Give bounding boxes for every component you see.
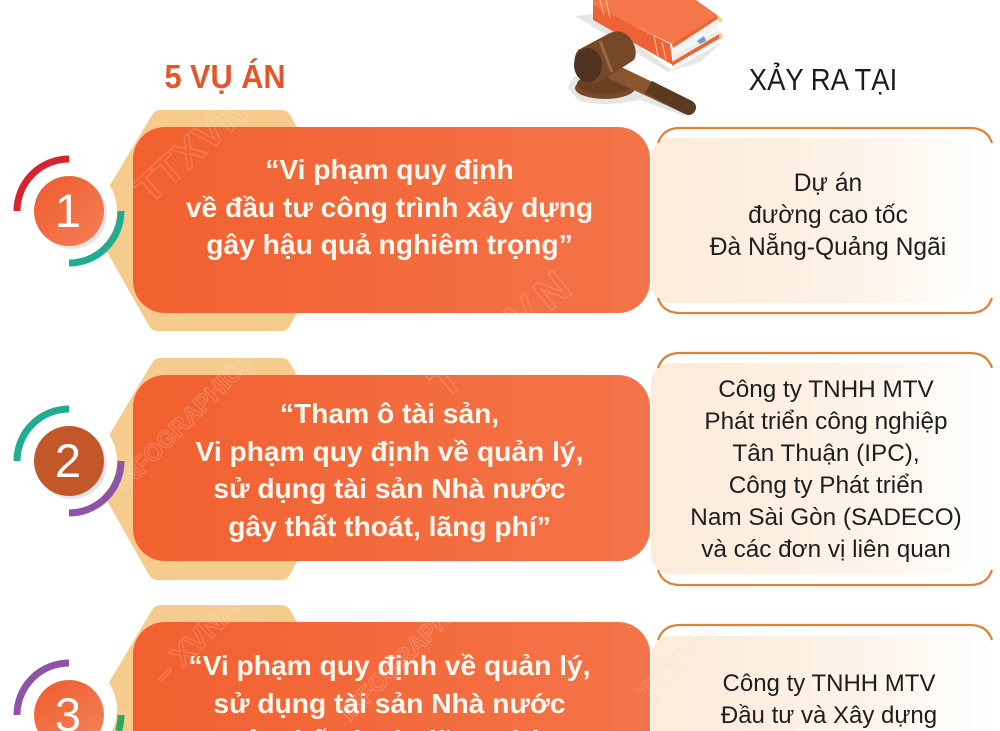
icon: law book and gavel [568, 0, 723, 116]
hexagon backdrop: case 1 [89, 110, 297, 331]
heading: xảy ra tại: XẢY RA TẠI [749, 62, 897, 97]
text: case 2 location: Nam Sài Gòn (SADECO) [690, 504, 962, 531]
text: case 1 location: Dự án [794, 170, 862, 197]
badge: number 3 [17, 662, 121, 731]
number 1: 1 [55, 184, 81, 237]
watermarks: INFOGRAPHICS [110, 347, 259, 496]
text: case 1 title: gây hậu quả nghiêm trọng” [206, 228, 573, 260]
watermarks [110, 88, 724, 726]
watermarks: – XVNA [147, 591, 247, 691]
hexagon backdrop: case 3 [89, 605, 297, 731]
text: case 2 location: và các đơn vị liên quan [701, 536, 951, 563]
badge: number 1 [17, 159, 121, 263]
text: case 2 location: Công ty Phát triển [729, 472, 923, 499]
text: case 1 location [710, 170, 946, 261]
text: case 2 title [196, 397, 583, 542]
text: case 3 location [721, 670, 937, 729]
text: case 3 location: Đầu tư và Xây dựng [721, 702, 937, 729]
text: case 1 location: Đà Nẵng-Quảng Ngãi [710, 234, 946, 261]
text: case 2 location [690, 376, 962, 563]
text: case 1 location: đường cao tốc [748, 202, 908, 229]
watermarks: TTXVN [632, 618, 724, 711]
heading: 5 vụ án: 5 VỤ ÁN [164, 58, 286, 95]
panel: case 2 title background [133, 375, 650, 561]
text: case 2 title: “Tham ô tài sản, [280, 397, 499, 429]
watermarks: INFOGRAPHICS [335, 577, 484, 726]
watermarks: TTXVN [420, 258, 585, 408]
text: case 3 title: sử dụng tài sản Nhà nước [213, 686, 566, 718]
text: case 3 title [188, 649, 590, 731]
text: case 2 location: Phát triển công nghiệp [704, 408, 948, 435]
text: case 2 location: Tân Thuận (IPC), [732, 440, 920, 467]
text: case 1 title: về đầu tư công trình xây dựng [186, 190, 593, 222]
text: case 2 location: Công ty TNHH MTV [718, 376, 934, 403]
text: case 1 title [186, 153, 593, 260]
text: case 2 title: sử dụng tài sản Nhà nước [213, 472, 566, 504]
text: case 2 title: gây thất thoát, lãng phí” [228, 510, 551, 542]
watermarks: TTXVN [127, 88, 257, 212]
panel: case 1 location [651, 128, 992, 313]
badge: number 2 [17, 409, 121, 513]
hexagon backdrop: case 2 [89, 358, 297, 580]
panel: case 1 title background [133, 127, 650, 313]
panel: case 2 location [651, 353, 992, 585]
number 2: 2 [55, 434, 81, 487]
text: case 3 title: “Vi phạm quy định về quản lý, [188, 649, 590, 681]
text: case 2 title: Vi phạm quy định về quản lý, [196, 434, 583, 466]
text: case 3 location: Công ty TNHH MTV [723, 670, 935, 697]
text: case 1 title: “Vi phạm quy định [265, 153, 514, 185]
panel: case 3 title background [133, 622, 650, 731]
panel: case 3 location [651, 625, 992, 731]
